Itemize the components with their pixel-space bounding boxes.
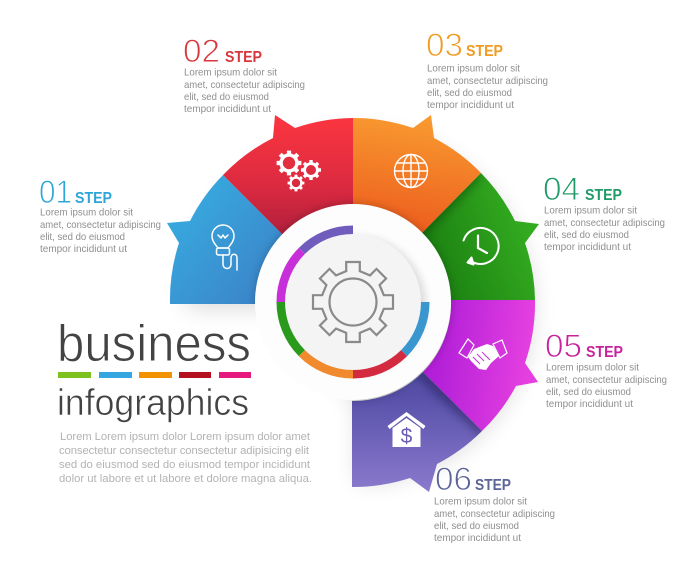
progress ring <box>281 230 425 374</box>
centre disc shadow <box>288 236 426 374</box>
step 01 text: STEP <box>75 190 112 207</box>
icon: handshake <box>459 339 507 370</box>
step 01 text <box>39 174 161 255</box>
centre disc <box>285 234 421 370</box>
step 03 text: tempor incididunt ut <box>427 100 514 111</box>
step 02 text: amet, consectetur adipiscing <box>184 80 305 91</box>
step 02 text: 02 <box>183 33 220 69</box>
step 01 text: tempor incididunt ut <box>40 244 127 255</box>
panel: step 03 orange segment <box>353 115 481 233</box>
step 05 text: elit, sed do eiusmod <box>546 387 631 398</box>
step 02 text: elit, sed do eiusmod <box>184 92 269 103</box>
step 01 text: 01 <box>39 174 72 210</box>
panel: step 01 blue segment <box>167 175 283 304</box>
step 02 text <box>183 33 305 115</box>
paragraph: Lorem Lorem ipsum dolor Lorem ipsum dolor amet <box>60 431 311 443</box>
icon: gears <box>277 151 321 191</box>
step 04 text <box>543 171 665 253</box>
colour bars <box>58 372 251 378</box>
step 02 text: tempor incididunt ut <box>184 104 271 115</box>
paragraph: consectetur consectetur consectetur adipisicing elit <box>59 445 310 457</box>
panel: step 06 indigo segment <box>352 372 482 492</box>
title: infographics: infographics <box>57 382 249 423</box>
step 05 text <box>545 328 667 410</box>
icon: house with dollar: $ <box>401 425 413 448</box>
step 04 text: elit, sed do eiusmod <box>544 230 629 241</box>
panel: step 04 green segment <box>422 173 539 300</box>
step 04 text: tempor incididunt ut <box>544 242 631 253</box>
step 03 text: STEP <box>466 43 503 60</box>
paragraph: sed do eiusmod sed do eiusmod tempor incididunt <box>59 459 311 471</box>
step 02 text: Lorem ipsum dolor sit <box>184 68 277 78</box>
panel: step 02 red segment <box>223 115 353 235</box>
step 04 text: amet, consectetur adipiscing <box>544 218 665 229</box>
step 06 text: 06 <box>435 461 472 497</box>
step 03 text: 03 <box>426 27 463 63</box>
step 02 text: STEP <box>225 49 262 66</box>
icon: house with dollar <box>388 412 426 448</box>
step 03 text <box>426 27 548 111</box>
step 01 text: Lorem ipsum dolor sit <box>40 208 133 218</box>
step 03 text: Lorem ipsum dolor sit <box>427 64 520 74</box>
step 03 text: amet, consectetur adipiscing <box>427 76 548 87</box>
step 05 text: 05 <box>545 328 582 364</box>
paragraph <box>59 431 312 485</box>
step 01 text: elit, sed do eiusmod <box>40 232 125 243</box>
step 06 text: amet, consectetur adipiscing <box>434 509 555 520</box>
icon: centre gear <box>313 262 393 342</box>
step 01 text: amet, consectetur adipiscing <box>40 220 161 231</box>
title: business: business <box>57 315 251 373</box>
step 06 text: STEP <box>475 477 511 494</box>
icon: globe <box>394 154 428 188</box>
step 06 text <box>434 461 555 544</box>
paragraph: dolor ut labore et ut labore et dolore magna aliqua. <box>59 473 312 485</box>
step 05 text: STEP <box>586 344 623 361</box>
step 05 text: Lorem ipsum dolor sit <box>546 362 639 374</box>
step 04 text: Lorem ipsum dolor sit <box>544 206 637 216</box>
step 06 text: Lorem ipsum dolor sit <box>434 496 527 508</box>
step 03 text: elit, sed do eiusmod <box>427 88 512 99</box>
step 06 text: elit, sed do eiusmod <box>434 521 519 532</box>
step 04 text: STEP <box>585 187 622 204</box>
step 06 text: tempor incididunt ut <box>434 533 521 544</box>
white centre circle <box>255 204 451 400</box>
panel: step 05 purple segment <box>423 300 538 431</box>
icon: light bulb <box>212 225 237 270</box>
step 05 text: amet, consectetur adipiscing <box>546 375 667 386</box>
step 04 text: 04 <box>543 171 580 207</box>
step 05 text: tempor incididunt ut <box>546 399 633 410</box>
icon: clock <box>464 228 499 264</box>
